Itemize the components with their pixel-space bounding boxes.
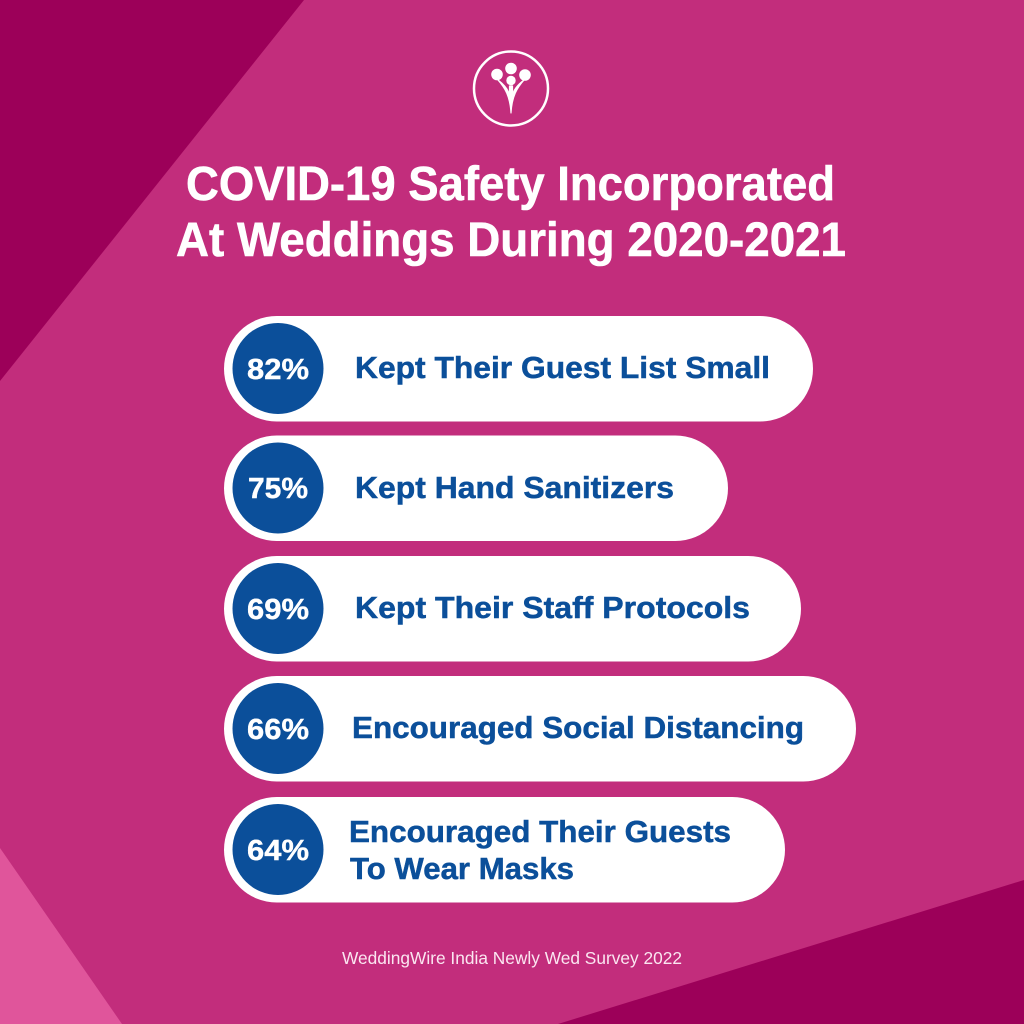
title: COVID-19 Safety Incorporated xyxy=(186,158,835,211)
item: 75% kept hand sanitizers: Kept Hand Sanitizers xyxy=(355,470,674,505)
source note: WeddingWire India Newly Wed Survey 2022 xyxy=(342,948,682,968)
item: 69% kept staff protocols: 69% xyxy=(247,594,309,626)
icon: bouquet logo xyxy=(474,52,548,126)
item: 66% encouraged social distancing: Encouraged Social Distancing xyxy=(352,710,804,745)
item: 69% kept staff protocols xyxy=(224,556,801,662)
item: 82% kept guest list small: Kept Their Guest List Small xyxy=(355,350,770,385)
item: 64% encouraged guests to wear masks: 64% xyxy=(247,835,309,867)
item: 75% kept hand sanitizers xyxy=(224,436,728,541)
item: 82% kept guest list small: 82% xyxy=(247,354,309,386)
item: 75% kept hand sanitizers: 75% xyxy=(248,473,308,505)
item: 64% encouraged guests to wear masks: Encouraged Their Guests xyxy=(349,814,731,849)
title: At Weddings During 2020-2021 xyxy=(176,214,846,267)
item: 64% encouraged guests to wear masks xyxy=(224,797,785,902)
item: 64% encouraged guests to wear masks: To Wear Masks xyxy=(350,851,574,886)
item: 69% kept staff protocols: Kept Their Staff Protocols xyxy=(355,590,750,625)
item: 66% encouraged social distancing xyxy=(224,676,856,782)
item: 66% encouraged social distancing: 66% xyxy=(247,714,309,746)
title xyxy=(176,158,846,267)
item: 82% kept guest list small xyxy=(224,316,813,422)
